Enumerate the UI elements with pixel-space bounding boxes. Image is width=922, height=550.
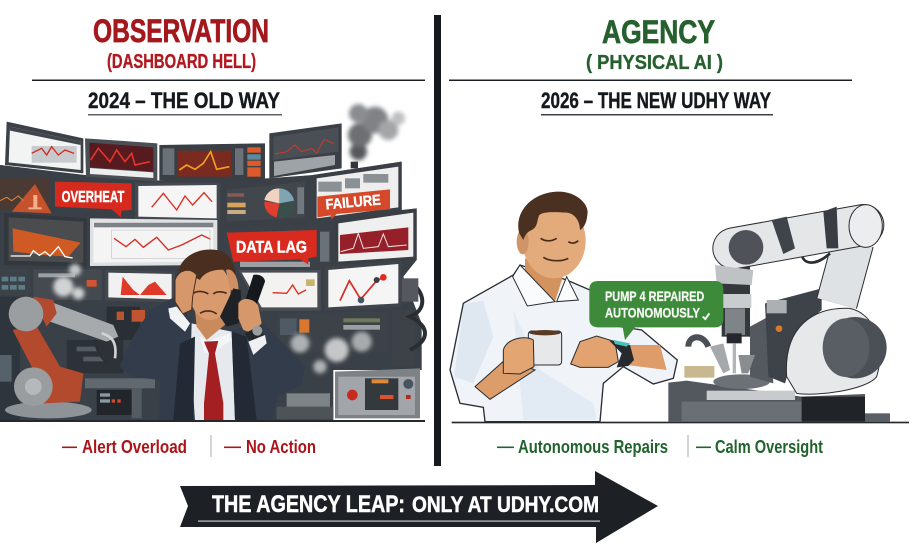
panel: observation header <box>32 13 425 116</box>
arrow label: THE AGENCY LEAP: <box>212 491 405 518</box>
speech bubble: pump 4 repaired: AUTONOMOUSLY <box>605 304 701 320</box>
illustration: calm operator and robot <box>450 192 909 423</box>
illustration: dashboard wall and stressed manager <box>0 104 425 422</box>
monitor: red area chart <box>105 269 175 303</box>
monitor: phone side chart <box>238 270 321 311</box>
monitor: data lag <box>222 223 333 268</box>
monitor: orange area chart <box>4 213 87 267</box>
monitor: top row 1 <box>5 122 83 173</box>
console unit <box>277 368 420 419</box>
arrow label <box>212 491 599 518</box>
caption: alert overload: Alert Overload <box>82 437 187 457</box>
smoke top <box>348 104 405 160</box>
arrow: the agency leap <box>180 471 658 543</box>
monitor: failure <box>313 162 402 222</box>
heading: 2026 the new udhy way: 2026 – THE NEW UDHY WAY <box>541 88 771 113</box>
speech bubble: pump 4 repaired <box>589 281 723 340</box>
monitor: failure: FAILURE <box>325 193 382 213</box>
speech bubble: pump 4 repaired: PUMP 4 REPAIRED <box>605 288 704 304</box>
monitor: top row 2 <box>85 138 157 182</box>
monitor: node chart <box>325 260 402 311</box>
subheading: dashboard hell: (DASHBOARD HELL) <box>107 51 256 73</box>
smoke wisps <box>53 264 372 373</box>
caption: calm oversight: Calm Oversight <box>715 437 823 457</box>
arrow label: ONLY AT UDHY.COM <box>412 492 599 517</box>
caption: no action: No Action <box>246 437 316 457</box>
heading: agency: AGENCY <box>602 14 715 50</box>
calm operator <box>450 192 677 422</box>
monitor: data lag: DATA LAG <box>236 237 307 256</box>
panel: agency header <box>449 14 852 116</box>
monitor: top row 4 <box>269 123 342 178</box>
heading: 2024 the old way: 2024 – THE OLD WAY <box>88 88 280 113</box>
monitor: warning triangle <box>0 165 53 213</box>
heading: observation: OBSERVATION <box>93 13 269 49</box>
control panel <box>277 312 388 353</box>
subheading: physical ai: ( PHYSICAL AI ) <box>586 52 723 74</box>
alert: overheat: OVERHEAT <box>62 189 125 206</box>
white robot arm <box>668 205 890 422</box>
alert: overheat <box>55 182 132 217</box>
caption: no action <box>224 437 316 457</box>
monitor: top row 3 <box>159 143 265 181</box>
monitor: white red chart <box>135 183 220 220</box>
machinery backdrop <box>0 162 425 420</box>
orange robot arm <box>5 297 118 418</box>
monitor: pie chart <box>222 177 309 225</box>
monitor: red pulse <box>335 208 417 265</box>
stressed manager <box>119 249 305 422</box>
monitor: large line chart <box>90 218 217 266</box>
monitor: lower left console <box>0 268 102 300</box>
caption: autonomous repairs: Autonomous Repairs <box>518 437 668 457</box>
